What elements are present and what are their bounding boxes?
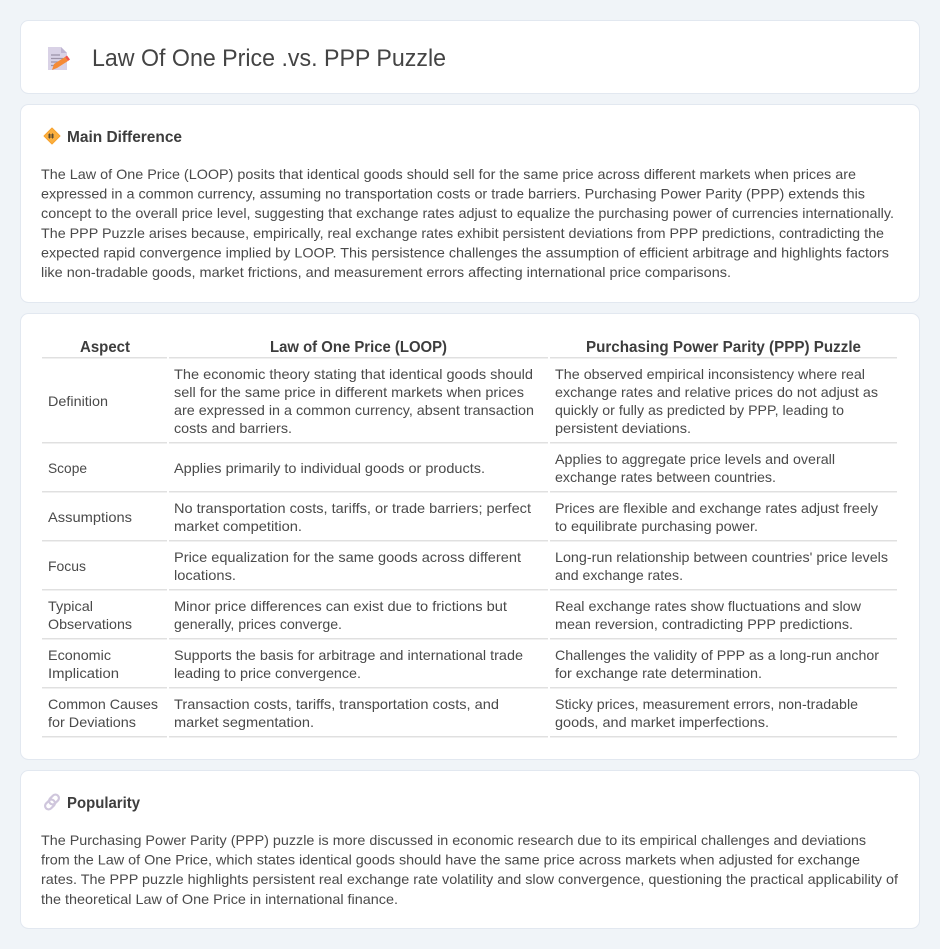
- row: common causes for deviations: goods, and market imperfections.: [555, 714, 769, 730]
- row: definition: The observed empirical inconsistency where real: [555, 366, 865, 382]
- row: focus: Long-run relationship between countries' price levels: [555, 549, 888, 565]
- table header row: Aspect: [80, 339, 131, 356]
- table header row: Purchasing Power Parity (PPP) Puzzle: [586, 339, 861, 356]
- heading: popularity: Popularity: [67, 795, 140, 812]
- row: common causes for deviations: for Deviations: [48, 714, 136, 730]
- row: focus: Focus: [48, 558, 86, 574]
- popularity paragraph: from the Law of One Price, which states identical goods should have the same price across markets when adjusted for exchange: [41, 852, 860, 868]
- row: typical observations: Observations: [48, 616, 132, 632]
- row: focus: and exchange rates.: [555, 567, 683, 583]
- row: definition: sell for the same price in different markets when prices: [174, 384, 524, 400]
- table header row: [42, 339, 897, 358]
- row: definition: The economic theory stating that identical goods should: [174, 366, 533, 382]
- row: definition: exchange rates and relative prices do not adjust as: [555, 384, 878, 400]
- panel: title header: [20, 20, 920, 94]
- row: assumptions: Assumptions: [48, 509, 132, 525]
- row: definition: are expressed in a common currency, absent transaction: [174, 402, 534, 418]
- main difference paragraph: The PPP Puzzle arises because, empirically, real exchange rates exhibit persistent deviations from PPP predictions, contradicting the: [41, 225, 884, 241]
- main difference paragraph: The Law of One Price (LOOP) posits that identical goods should sell for the same price across different markets when prices are: [41, 166, 856, 182]
- row: assumptions: No transportation costs, tariffs, or trade barriers; perfect: [174, 500, 531, 516]
- row: assumptions: Prices are flexible and exchange rates adjust freely: [555, 500, 878, 516]
- popularity paragraph: the theoretical Law of One Price in international finance.: [41, 891, 398, 907]
- table header row: Law of One Price (LOOP): [270, 339, 447, 356]
- row: typical observations: mean reversion, contradicting PPP predictions.: [555, 616, 853, 632]
- main difference paragraph: [41, 166, 894, 280]
- row: scope: Applies primarily to individual goods or products.: [174, 460, 485, 476]
- row: typical observations: [42, 598, 897, 640]
- main difference paragraph: concept to the overall price level, suggesting that exchange rates adjust to equalize the purchasing power of currencies internationally.: [41, 205, 894, 221]
- row: economic implication: Economic: [48, 647, 111, 663]
- row: economic implication: for exchange rate determination.: [555, 665, 762, 681]
- row: economic implication: leading to price convergence.: [174, 665, 361, 681]
- icon: document with pencil: [48, 47, 70, 70]
- row: common causes for deviations: Transaction costs, tariffs, transportation costs, and: [174, 696, 499, 712]
- main difference paragraph: expected rapid convergence implied by LOOP. This persistence challenges the assumption of efficient arbitrage and highlights factors: [41, 244, 889, 260]
- row: assumptions: market competition.: [174, 518, 302, 534]
- row: scope: [42, 451, 897, 492]
- panel: popularity: [20, 770, 920, 928]
- row: common causes for deviations: Common Causes: [48, 696, 158, 712]
- row: focus: locations.: [174, 567, 236, 583]
- panel: comparison table: [20, 314, 920, 760]
- heading: main difference: Main Difference: [67, 129, 182, 146]
- row: common causes for deviations: market segmentation.: [174, 714, 314, 730]
- row: economic implication: Supports the basis for arbitrage and international trade: [174, 647, 523, 663]
- row: definition: quickly or fully as predicted by PPP, leading to: [555, 402, 844, 418]
- main difference paragraph: like non-tradable goods, market frictions, and measurement errors affecting international price comparisons.: [41, 264, 731, 280]
- panel: main difference: [20, 104, 920, 302]
- row: scope: exchange rates between countries.: [555, 469, 776, 485]
- row: common causes for deviations: Sticky prices, measurement errors, non-tradable: [555, 696, 858, 712]
- popularity paragraph: rates. The PPP puzzle highlights persistent real exchange rate volatility and slow convergence, questioning the practical applicability of: [41, 871, 898, 887]
- icon: orange diamond: [44, 128, 60, 144]
- row: scope: Applies to aggregate price levels and overall: [555, 451, 835, 467]
- row: typical observations: generally, prices converge.: [174, 616, 342, 632]
- popularity paragraph: [41, 832, 898, 907]
- row: definition: Definition: [48, 393, 108, 409]
- row: focus: Price equalization for the same goods across different: [174, 549, 521, 565]
- row: economic implication: [42, 647, 897, 688]
- main difference paragraph: expressed in a common currency, assuming no transportation costs or trade barriers. Purchasing Power Parity (PPP) extends this: [41, 186, 865, 202]
- title: Law Of One Price .vs. PPP Puzzle: [92, 45, 446, 72]
- row: definition: [42, 366, 897, 444]
- row: typical observations: Minor price differences can exist due to frictions but: [174, 598, 507, 614]
- row: assumptions: [42, 500, 897, 542]
- row: economic implication: Challenges the validity of PPP as a long-run anchor: [555, 647, 879, 663]
- row: definition: persistent deviations.: [555, 420, 691, 436]
- row: focus: [42, 549, 897, 590]
- row: economic implication: Implication: [48, 665, 119, 681]
- row: typical observations: Real exchange rates show fluctuations and slow: [555, 598, 862, 614]
- row: common causes for deviations: [42, 696, 897, 738]
- popularity paragraph: The Purchasing Power Parity (PPP) puzzle is more discussed in economic research due to its empirical challenges and deviations: [41, 832, 866, 848]
- row: scope: Scope: [48, 460, 87, 476]
- row: typical observations: Typical: [48, 598, 93, 614]
- row: definition: costs and barriers.: [174, 420, 292, 436]
- icon: chain link: [44, 793, 60, 811]
- row: assumptions: to equilibrate purchasing power.: [555, 518, 758, 534]
